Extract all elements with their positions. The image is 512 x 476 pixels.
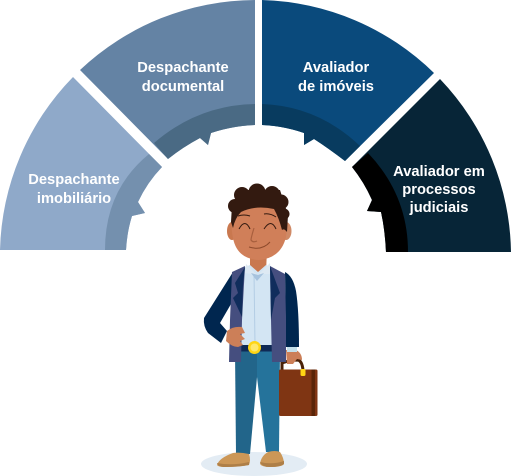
label: Avaliador em processos judiciais: processos [402,182,476,198]
panel: Avaliador em processos judiciais [352,79,511,252]
panel: Avaliador de imoveis [262,0,434,161]
label: Avaliador em processos judiciais: judiciais [409,200,468,216]
label: Despachante documental: Despachante [137,60,229,76]
collar [245,263,271,275]
left hand [226,327,245,347]
left sleeve [204,272,234,343]
label: Despachante imobiliario: imobiliário [37,191,111,207]
nose [251,228,257,242]
lapels [233,266,280,320]
smile [249,242,270,248]
ears [227,222,292,240]
neck [250,250,267,281]
face [232,205,287,260]
label: Avaliador de imoveis: de imóveis [298,79,374,95]
right cuff [287,346,297,352]
right hand [286,350,302,364]
hair [228,184,290,232]
panel: Despachante documental [80,0,255,159]
label: Avaliador em processos judiciais: Avaliador em [393,164,485,180]
shirt [240,265,272,348]
shoes [217,451,284,467]
panel: Despachante imobiliario [0,77,162,250]
right sleeve [285,272,299,347]
belt buckle [248,341,261,354]
label: Despachante imobiliario: Despachante [28,172,120,188]
briefcase [279,360,318,416]
label: Avaliador de imoveis: Avaliador [303,60,369,76]
belt [240,345,272,352]
jacket panels [229,266,286,362]
shadow [201,452,307,476]
eyes and brows [238,214,276,229]
legs [235,350,280,454]
label: Despachante documental: documental [142,79,224,95]
figure: man with briefcase [201,184,318,476]
